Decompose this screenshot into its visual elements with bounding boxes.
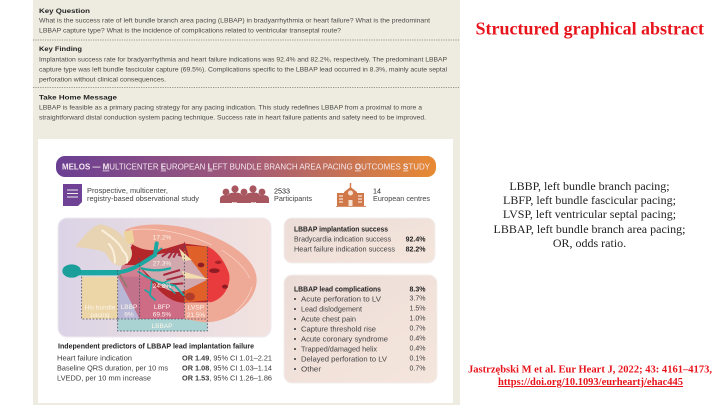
panel: LBBAP lead complications: 0.4%: [410, 346, 426, 352]
panel: LBBAP lead complications: 0.7%: [410, 366, 426, 372]
panel: LBBAP implantation success: 82.2%: [406, 246, 426, 254]
text block: key question: [39, 8, 430, 34]
text block: predictors of implantation failure: Independent predictors of LBBAP lead implantation failure: [58, 344, 254, 350]
text block: take home message: straightforward distal conduction system pacing technique. Success rate in heart failure patients and safety need to be improved.: [39, 114, 426, 122]
heading bar: MELOS study title: [56, 156, 436, 177]
panel: LBBAP lead complications: Acute perforation to LV: [301, 296, 381, 304]
text block: study design: registry-based observational study: [87, 196, 200, 203]
panel: LBBAP implantation success: Bradycardia indication success: [294, 236, 391, 244]
panel: LBBAP lead complications: Acute coronary syndrome: [301, 336, 388, 344]
text block: participants: Participants: [274, 196, 313, 203]
icon: participants: [220, 185, 269, 203]
title: structured graphical abstract: Structured graphical abstract: [476, 18, 704, 38]
panel: LBBAP lead complications: 0.4%: [410, 336, 426, 342]
zone labels: His bundle: [85, 304, 116, 312]
zone labels: 9%: [124, 312, 134, 318]
text block: key finding: perforation without clinical consequences.: [39, 76, 166, 84]
zone labels: 27.3%: [153, 260, 171, 268]
panel: LBBAP lead complications: [284, 275, 437, 383]
text block: centres: [373, 188, 431, 203]
zone labels: LBBAP: [152, 323, 172, 330]
outer muscle: [125, 224, 257, 322]
panel: beige background of abstract: [33, 0, 460, 405]
text block: key question: LBBAP capture type? What is the incidence of complications related to ventricular transeptal route?: [39, 28, 342, 34]
text block: abbreviations: LVSP, left ventricular septal pacing;: [503, 207, 676, 221]
panel: LBBAP lead complications: Trapped/damaged helix: [301, 346, 378, 354]
text block: key finding: Key Finding: [39, 46, 82, 53]
zone labels: 21.5%: [187, 312, 205, 319]
pacing zones: [82, 277, 207, 331]
text block: predictors of implantation failure: OR 1.49, 95% CI 1.01–2.21: [182, 356, 272, 362]
text block: take home message: Take Home Message: [39, 94, 117, 102]
zone labels: LBBP: [121, 304, 137, 311]
text block: study design: Prospective, multicenter,: [87, 188, 168, 195]
zone labels: LVSP: [188, 304, 204, 312]
text block: key finding: capture type was left bundle fascicular capture (69.5%). Complications specific to the LBBAP lead occurred in 8.3%, mainly acute septal: [39, 66, 447, 74]
panel: heart diagram: [58, 218, 271, 337]
text block: key question: Key Question: [39, 8, 90, 15]
panel: LBBAP implantation success: 92.4%: [406, 236, 426, 244]
panel: LBBAP lead complications: 0.7%: [410, 326, 426, 332]
panel: LBBAP lead complications: 1.0%: [410, 316, 426, 322]
pale cavity: [138, 253, 207, 292]
valve and atrium: [123, 230, 134, 246]
zone labels: 24.8%: [153, 283, 171, 290]
zone labels: 69.5%: [153, 312, 171, 318]
text block: study design: [87, 188, 200, 203]
text block: abbreviations: LBFP, left bundle fascicular pacing;: [503, 193, 676, 207]
zone labels: LBFP: [154, 304, 170, 311]
panel: LBBAP implantation success: Heart failure indication success: [294, 246, 396, 254]
dark red septal wall: [122, 243, 208, 303]
panel: LBBAP lead complications: Lead dislodgement: [301, 306, 362, 314]
text block: predictors of implantation failure: Heart failure indication: [57, 356, 132, 362]
text block: key finding: Implantation success rate for bradyarrhythmia and heart failure indications was 92.4% and 82.2%, respectively. The predominant LBBAP: [39, 56, 447, 64]
text block: key finding: [39, 46, 447, 84]
panel: LBBAP lead complications: Delayed perforation to LV: [301, 356, 387, 364]
panel: white infographic card: [38, 139, 453, 403]
orange wall: [184, 246, 207, 302]
panel: LBBAP lead complications: 1.5%: [410, 306, 426, 312]
panel: LBBAP lead complications: Other: [301, 366, 322, 374]
panel: LBBAP lead complications: LBBAP lead complications: [294, 286, 381, 294]
text block: predictors of implantation failure: LVEDD, per 10 mm increase: [57, 376, 151, 382]
text block: key question: What is the success rate of left bundle branch area pacing (LBBAP) in bradyarrhythmia or heart failure? What is the predominant: [39, 18, 430, 24]
fibre bundles: [162, 244, 188, 284]
red myocardium: [207, 247, 229, 302]
text block: abbreviations: OR, odds ratio.: [553, 236, 626, 250]
icon: document: [63, 184, 82, 206]
panel: LBBAP lead complications: 3.7%: [410, 296, 426, 302]
panel: LBBAP lead complications: 0.1%: [410, 356, 426, 362]
text block: citation: https://doi.org/10.1093/eurheartj/ehac445: [498, 377, 683, 388]
panel: LBBAP lead complications: 8.3%: [410, 286, 426, 294]
panel: LBBAP lead complications: Acute chest pain: [301, 316, 356, 324]
text block: predictors of implantation failure: OR 1.53, 95% CI 1.26–1.86: [182, 376, 272, 382]
heading bar: MELOS study title: MELOS — MULTICENTER EUROPEAN LEFT BUNDLE BRANCH AREA PACING OUTCOMES STUDY: [62, 162, 431, 172]
text block: participants: 2533: [274, 188, 290, 196]
text block: take home message: [39, 94, 426, 122]
text block: abbreviations: LBBAP, left bundle branch area pacing;: [494, 222, 685, 236]
text block: abbreviations: [494, 179, 685, 250]
text block: citation: [468, 364, 713, 388]
panel: LBBAP implantation success: [284, 218, 435, 263]
text block: citation: Jastrzębski M et al. Eur Heart J, 2022; 43: 4161–4173,: [468, 364, 713, 376]
illustration: heart: [62, 224, 257, 331]
panel: LBBAP implantation success: LBBAP implantation success: [294, 226, 388, 234]
zone labels: pacing: [90, 312, 110, 319]
panel: LBBAP lead complications: Capture threshold rise: [301, 326, 376, 334]
text block: centres: European centres: [373, 196, 431, 203]
text block: predictors of implantation failure: OR 1.08, 95% CI 1.03–1.14: [182, 366, 272, 372]
text block: abbreviations: LBBP, left bundle branch pacing;: [509, 179, 670, 193]
icon: hospital: [336, 183, 366, 207]
dashed zone outlines: [82, 246, 207, 331]
zone labels: [85, 234, 205, 330]
text block: predictors of implantation failure: [57, 344, 272, 382]
zone labels: 17.2%: [153, 234, 171, 242]
text block: participants: [274, 188, 313, 203]
text block: centres: 14: [373, 188, 381, 196]
teal conduction system: [62, 243, 183, 300]
text block: predictors of implantation failure: Baseline QRS duration, per 10 ms: [57, 366, 169, 372]
left ventricle lower wall: [118, 245, 184, 319]
text block: take home message: LBBAP is feasible as a primary pacing strategy for any pacing indication. This study redefines LBBAP from a proximal to more a: [39, 104, 423, 112]
